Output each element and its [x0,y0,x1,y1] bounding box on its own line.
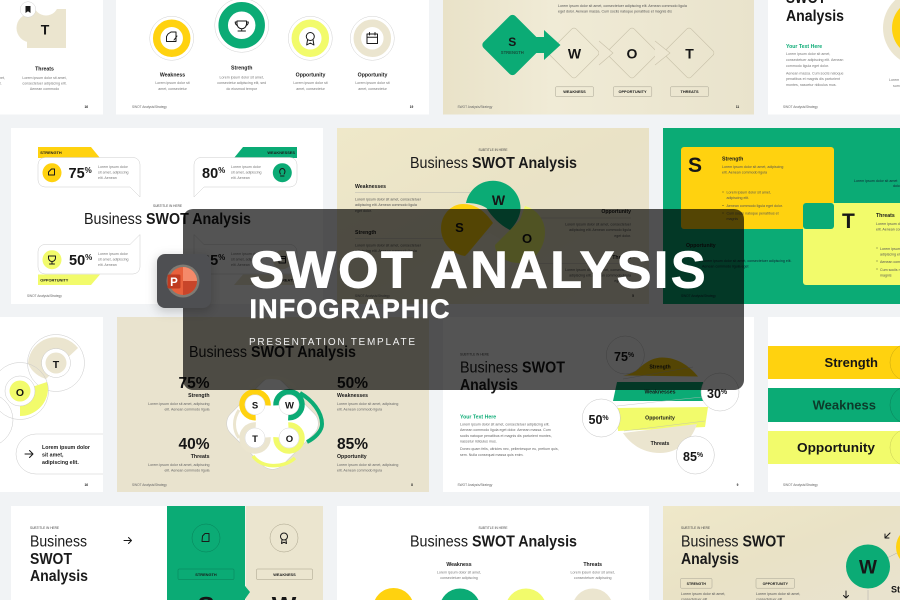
text: right column: eget dolor. [614,234,631,238]
callout: 30 percent: 30 [707,387,721,401]
chart: SWOT petals: S [455,220,464,235]
callout: strength 75: STRENGTH [40,150,62,155]
panel: strength card: Cum sociis natoque penatibus et [726,212,779,216]
labels: diamond tags [556,87,708,96]
text: left stats: Threats [191,454,210,460]
text block: sem. Nulla consequat massa quis enim. [460,453,524,457]
text block: Donec quam felis, ultricies nec, pellentesque eu, pretium quis, [460,447,559,451]
callout: threats 65: THREATS [277,278,295,282]
panel: slide analysis text top right: consectetuer adipiscing elit. Aenean [786,58,843,62]
text: left stats: elit. Aenean commodo ligula [165,408,210,412]
panel: slide percentage callouts [11,128,323,304]
text: left column: Strength [355,230,376,236]
chart: clover diagram: O [286,434,293,445]
text: left column: adipiscing elit. Aenean commodo ligula [355,249,417,253]
text: left column [355,184,470,253]
panel: slide analysis text top right: Lorem [889,78,899,82]
panel: strength card: Lorem ipsum dolor sit amet, [726,190,771,194]
callout: 50 percent: % [602,415,609,422]
panel: slide percentage callouts: SWOT Analysis/Strategy [27,294,62,298]
callout: opportunity 50: % [85,253,92,262]
chart: clover diagram: S [252,400,258,412]
text: left column: Lorem ipsum dolor sit amet, consectetuer [355,244,422,248]
text: circle labels: Strength [231,66,252,72]
panel: slide two columns [11,506,323,600]
text: threats: Aenean commodo [30,87,59,91]
title: Business [30,534,87,550]
chart: SWOT petals: W [492,192,506,208]
title: Business SWOT [681,534,785,550]
panel: threats card: Threats [876,213,895,219]
text block [460,414,559,457]
text: left column: eget dolor. [355,209,372,213]
panel: slide analysis text top right: commodo ligula eget dolor. [786,64,829,68]
text: threats: Threats [583,562,602,568]
band: weakness: Weakness [813,398,876,412]
text: circle labels: do eiusmod tempor [226,87,258,91]
panel: slide analysis text top right: Your Text Here [786,44,822,50]
callout: arrow pill: sit amet, [42,452,64,458]
text: left stats: Lorem ipsum dolor sit amet, adipiscing [148,463,210,467]
chart: clover diagram: W [285,400,294,412]
panel: slide four circles: 19 [410,105,413,109]
icon: T blob: T [41,22,50,38]
text: diamond letters: O [627,46,638,62]
label: strength: Lorem ipsum dolor sit amet, [681,592,725,596]
heading: infographic: INFOGRAPHIC [250,294,450,324]
chart: clover diagram: T [252,434,258,445]
text: green area notes: Lorem ipsum dolor sit amet, consectetuer adipiscing elit. [702,259,792,263]
panel: slide overlapping petals [337,128,649,304]
text: right column: Opportunity [601,209,631,215]
text: circle labels: amet, consectetur [158,87,188,91]
callout: weaknesses 80: Lorem ipsum dolor [231,165,262,169]
text: right stats: 50% [337,375,368,392]
text: threats [0,66,67,91]
chart: discs [373,588,613,600]
column: strength: STRENGTH [195,572,217,577]
text block: nascetur ridiculus mus. [460,440,497,444]
text: left column: Weaknesses [355,184,386,190]
callout: 85 percent: 85 [683,450,697,464]
panel: slide four circles: SWOT Analysis/Strategy [132,105,167,109]
panel: slide analysis text top right: SWOT Analysis/Strategy [783,105,818,109]
callout: opportunity 50: elit. Aenean [98,263,117,267]
chart: segmented circle: Weaknesses [644,390,676,396]
text: threats: Threats [35,66,54,72]
text: right stats [337,375,398,472]
callout: opportunity 50: 50 [69,253,85,269]
icon: PowerPoint badge [156,254,212,312]
text: right stats: 85% [337,436,368,453]
chart: chained circles [0,334,84,447]
panel: slide green cards [663,128,900,304]
labels: diamond tags: WEAKNESS [563,89,586,94]
labels: diamond tags: THREATS [680,89,699,94]
title [681,526,785,568]
callout: strength 75: 75 [68,166,85,182]
text: right column: Lorem ipsum dolor sit amet, consectetuer [565,268,632,272]
text: diamond letters: T [685,46,694,62]
callout: arrow pill: Lorem ipsum dolor [42,445,90,451]
label: opportunity: Lorem ipsum dolor sit amet, [756,592,800,596]
panel: strength card: elit. Aenean commodo ligula [722,170,767,174]
band: strength: Strength [825,355,878,370]
text: circle labels: Lorem ipsum dolor sit [355,81,390,85]
panel: dark title overlay [183,209,744,390]
callout: 50 percent [582,399,620,437]
callout: weaknesses 80: elit. Aenean [231,176,250,180]
text: left stats [148,375,210,472]
text: green area notes: Opportunity [686,243,716,249]
title: SUBTITLE IN HERE [681,526,710,530]
icon: weakness ring [150,16,194,60]
title: Business SWOT Analysis [189,344,356,361]
icon: PowerPoint badge: P [170,277,178,289]
chart: segmented circle: Opportunity [645,416,675,422]
callout: arrow pill [16,434,103,474]
icon: green strength diamond [481,13,560,77]
callout: weaknesses 80: 80 [202,166,218,182]
callout: 30 percent [701,373,739,411]
chart: outline diamonds [548,27,715,79]
panel: strength card: S [688,154,702,177]
text: circle labels: amet, consectetur [296,87,326,91]
panel: slide segmented circle: 9 [737,483,739,487]
callout: threats 65: % [218,253,225,262]
panel: slide analysis text top right: penatibus et magnis dis parturient [786,77,840,81]
callout: opportunity 50: sit amet, adipiscing [98,258,129,262]
callout: strength 75: % [85,166,92,175]
panel: strength card: adipiscing elit. [726,196,749,200]
panel: slide overlapping petals: SWOT Analysis/Strategy [355,294,390,298]
title: Analysis [460,377,518,394]
text: left stats: Lorem ipsum dolor sit amet, adipiscing [148,402,210,406]
text: right stats: Opportunity [337,454,367,460]
chart: W node network: W [859,558,877,578]
panel: threats card: magnis [880,274,892,278]
panel: slide diamond flow: 11 [736,105,739,109]
text: circle labels: consectetur adipiscing elit, sed [217,81,266,85]
callout: threats 65 [194,234,297,285]
panel: slide analysis text top right: Analysis [786,8,844,25]
callout: threats 65: sit amet, adipiscing [231,258,262,262]
text: threats: Lorem ipsum dolor sit amet, [22,76,67,80]
callout: 75 percent: % [628,352,635,359]
chart: SWOT petals [441,181,545,276]
text: threats: consectetuer adipiscing elit. [22,81,67,85]
callout: 75 percent [606,336,644,374]
text: right stats: Lorem ipsum dolor sit amet, adipiscing [337,463,398,467]
text: circle labels: Weakness [160,72,185,78]
title: Analysis [681,551,739,568]
panel: slide clover diagram: SWOT Analysis/Strategy [132,483,167,487]
callout: 85 percent [676,436,714,474]
label: opportunity: OPPORTUNITY [763,582,789,586]
panel: slide clover diagram [117,317,429,492]
text: left stats: elit. Aenean commodo ligula [165,468,210,472]
panel: slide analysis text top right: Aenean massa. Cum sociis natoque [786,72,844,76]
callout: strength 75 [38,147,140,197]
panel: slide chain circles [0,317,103,492]
title: SUBTITLE IN HERE [478,526,508,530]
title: Business SWOT Analysis [410,155,577,172]
chart: segmented circle [613,358,708,453]
title [410,148,577,172]
callout: arrow pill: adipiscing elit. [42,460,79,466]
panel: strength card: Strength [722,156,743,162]
chart: segmented circle: Strength [649,364,671,370]
text: threats: Lorem ipsum dolor sit amet, [571,570,615,574]
icon: strength ring [215,0,269,52]
labels: diamond tags: OPPORTUNITY [618,89,647,94]
text: right column: adipiscing elit. Aenean commodo ligula [569,274,631,278]
panel: slide segmented circle: SWOT Analysis/Strategy [458,483,493,487]
title: SUBTITLE IN HERE [460,352,489,356]
panel: slide colour bands: SWOT Analysis/Strategy [783,483,818,487]
text: weakness: consectetuer adipiscing [440,576,478,580]
panel: slide four discs [337,506,649,600]
panel: slide analysis text top right: sum [893,84,900,88]
text: circle labels: Lorem ipsum dolor sit [155,81,190,85]
icon: arrow [124,538,132,544]
panel: threats card [803,203,900,285]
callout: 50 percent: 50 [588,413,602,427]
callout: opportunity 50: Lorem ipsum dolor [98,252,129,256]
column: weakness: WEAKNESS [273,572,296,577]
text: right stats: elit. Aenean commodo ligula [337,408,382,412]
label: strength: STRENGTH [687,582,706,586]
title: SUBTITLE IN HERE [153,204,182,208]
label: opportunity [756,578,800,600]
panel: slide colour bands [768,317,900,492]
title: Business SWOT [460,360,565,376]
callout: 30 percent: % [721,389,728,396]
panel: slide analysis text top right: montes, nascetur ridiculus mus. [786,83,837,87]
text: right column: eget dolor. [614,279,631,283]
text block: Aenean commodo ligula eget dolor. Aenean massa. Cum [460,428,551,432]
icon: green strength diamond: STRENGTH [501,50,524,55]
panel: slide threats fragment: 16 [85,105,88,109]
text: green area notes: Aenean commodo ligula eget [702,264,749,268]
text: left stats: 40% [178,436,210,453]
subheading: presentation template: PRESENTATION TEMPLATE [249,337,415,348]
text: circle labels [155,66,390,91]
icon: circle fragment [883,0,900,66]
panel: slide four circles [116,0,429,114]
text: right stats: Lorem ipsum dolor sit amet, adipiscing [337,402,398,406]
title: Analysis [30,568,88,585]
text: right column: Lorem ipsum dolor sit amet, consectetuer [565,222,632,226]
text block: Lorem ipsum dolor sit amet, consectetuer adipiscing elit. [460,422,550,426]
panel: slide segmented circle [443,317,754,492]
chart: chained circles: O [16,387,24,399]
title: SWOT [30,551,72,568]
panel: slide network [663,506,900,600]
text: weakness: Lorem ipsum dolor sit amet, [437,570,481,574]
panel: threats card: T [842,210,855,233]
callout: weaknesses 80: WEAKNESSES [267,150,295,155]
chart: W node network: St [891,584,900,594]
icon: green strength diamond: S [508,35,516,49]
title [30,526,88,585]
panel: slide clover diagram: 8 [411,483,413,487]
callout: threats 65: Lorem ipsum dolor [231,252,262,256]
callout: strength 75: Lorem ipsum dolor [98,165,129,169]
text: right column: Threats [612,255,631,261]
text: left column: adipiscing elit. Aenean commodo ligula [355,203,417,207]
band: weakness [768,386,900,424]
panel: slide diamond flow: SWOT Analysis/Strategy [458,105,493,109]
text: circle labels: amet, consectetur [358,87,388,91]
chart: SWOT petals: O [522,231,532,246]
callout: weaknesses 80: sit amet, adipiscing [231,170,262,174]
text: diamond letters [568,46,694,62]
panel: strength card: Lorem ipsum dolor sit amet, adipiscing [722,165,783,169]
text: left stats: 75% [178,375,210,392]
panel: slide analysis text top right: Lorem ipsum dolor sit amet, [786,52,830,56]
panel: strength card: Aenean commodo ligula eget dolor. [726,204,783,208]
text: circle labels: Lorem ipsum dolor sit amet, [220,76,264,80]
callout: strength 75: elit. Aenean [98,176,117,180]
text: right stats: elit. Aenean commodo ligula [337,468,382,472]
callout: 75 percent: 75 [614,350,628,364]
title [410,526,577,550]
title [460,352,565,394]
callout: threats 65: elit. Aenean [231,263,250,267]
panel: slide overlapping petals: 5 [632,294,634,298]
band: strength [768,344,900,382]
panel: slide threats fragment [0,0,103,114]
text: weakness [437,562,481,580]
panel: slide diamond flow [443,0,754,114]
text: left column: Lorem ipsum dolor sit amet, consectetuer [355,198,422,202]
panel: slide diamond flow: eget dolor. Aenean massa. Cum sociis natoque penatibus et magnis dis [558,10,672,14]
callout: weaknesses 80: % [218,166,225,175]
chart: segmented circle: Threats [651,441,669,447]
text: green area notes: SWOT Analysis/Strategy [681,294,716,298]
text: circle labels: Lorem ipsum dolor sit [293,81,328,85]
text: green area notes [681,179,900,298]
title: SUBTITLE IN HERE [478,148,508,152]
band: opportunity [768,428,900,466]
text: circle labels: Opportunity [358,72,387,78]
text: diamond letters: W [568,46,582,62]
chart: W node network [844,527,900,600]
callout: opportunity 50 [38,234,140,285]
text: right column: adipiscing elit. Aenean commodo ligula [569,228,631,232]
title: SWOT Analysis: SWOT ANALYSIS [250,242,706,300]
callout: 85 percent: % [697,452,704,459]
panel: slide chain circles: 16 [85,483,88,487]
text: right stats: Weaknesses [337,393,368,399]
label: strength [680,578,725,600]
callout: weaknesses 80 [194,147,297,197]
panel: strength card [681,147,834,229]
text block: Your Text Here [460,414,496,420]
text: weakness: Weakness [446,562,472,568]
panel: slide analysis text top right [768,0,900,114]
title [84,204,251,228]
title: SUBTITLE IN HERE [30,526,59,530]
text: threats: consectetuer adipiscing [574,576,611,580]
callout: strength 75: sit amet, adipiscing [98,170,129,174]
column: strength [167,506,250,600]
title: Business SWOT Analysis [410,534,577,550]
text: threats [571,562,615,580]
panel: strength card: magnis [726,217,738,221]
callout: threats 65: 65 [202,253,218,269]
panel: slide diamond flow: Lorem ipsum dolor sit amet, consectetuer adipiscing elit. Aenean commodo ligula [558,4,687,8]
column: weakness [245,506,323,600]
chart: chained circles: T [53,359,60,371]
icon: opportunity calendar ring [350,16,394,60]
band: opportunity: Opportunity [797,440,876,455]
text block: sociis natoque penatibus et magnis dis parturient montes, [460,434,552,438]
icon: opportunity ring [288,16,332,60]
text: right column [535,209,632,283]
callout: opportunity 50: OPPORTUNITY [40,278,69,282]
text: circle labels: Opportunity [296,72,325,78]
text: left stats: Strength [188,393,210,399]
text: green area notes: Lorem ipsum dolor sit amet [854,179,897,183]
chart: clover diagram [221,372,324,475]
title: Business SWOT Analysis [84,211,251,228]
